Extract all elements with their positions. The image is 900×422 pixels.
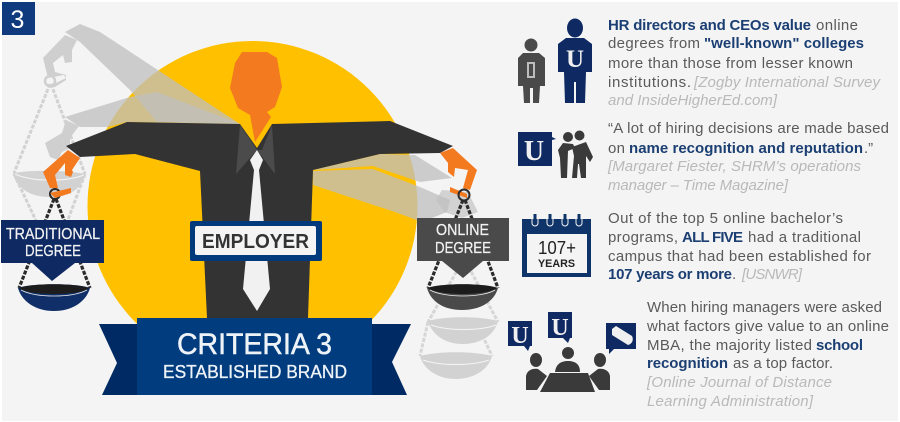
icon: two people with degree badges: U [566,46,584,73]
text: top 5 bachelor's programs: ALL FIVE [682,229,743,246]
text: top 5 bachelor's programs: [USNWR] [741,266,803,283]
text: hiring managers MBA [646,299,889,410]
right hand [440,148,477,190]
sign: online degree [417,218,509,278]
text: HR directors: HR directors and CEOs value [608,17,811,34]
text: top 5 bachelor's programs: . [732,266,736,283]
text: hiring decisions quote: name recognition and reputation [629,140,863,157]
icon: meeting with speech bubbles: U [551,315,569,341]
text: HR directors [608,17,882,109]
text: top 5 bachelor's programs: programs, [608,229,678,246]
banner title: CRITERIA 3 [177,328,332,361]
text: top 5 bachelor's programs: Out of the top 5 online bachelor’s [608,210,843,227]
employer figure [66,52,453,318]
sign: employer [190,221,322,261]
sign: traditional degree: DEGREE [25,243,81,260]
right scale: online degree pan [427,187,498,310]
text: hiring managers MBA: as a top factor. [733,355,833,372]
text: hiring managers MBA: school [816,337,863,354]
banner subtitle: ESTABLISHED BRAND [163,362,347,382]
sign: traditional degree: TRADITIONAL [6,226,100,243]
sign: online degree: DEGREE [435,240,491,257]
text: HR directors: online [816,17,858,34]
icon: two people with degree badges [518,18,592,103]
number badge [2,2,35,35]
banner [99,318,411,395]
lapels [236,125,275,174]
text: HR directors: more than those from lesser known [608,55,853,72]
text: hiring managers MBA: When hiring managers were asked [647,299,882,316]
ghost scale: left raised position [13,35,85,225]
number badge: 3 [11,6,24,34]
text: hiring managers MBA: MBA, the majority listed [647,337,812,354]
text: hiring decisions quote: manager – Time Magazine] [608,177,789,194]
yellow circle [88,41,418,371]
tie [243,150,270,311]
sign: employer: EMPLOYER [202,231,310,253]
ghost arms [65,24,452,222]
text: top 5 bachelor's programs [608,210,871,283]
text: HR directors: degrees from [608,35,700,52]
ghost scale: right lowered position [420,190,498,379]
jacket [66,121,453,318]
sign: traditional degree [1,220,104,281]
text: top 5 bachelor's programs: campus that had been established for [608,248,871,265]
left scale: traditional degree pan [18,188,90,311]
icon: meeting with speech bubbles: U [511,323,529,349]
text: hiring decisions quote: .” [864,140,873,157]
text: HR directors: and InsideHigherEd.com] [608,92,778,109]
text: hiring managers MBA: [Online Journal of Distance [646,374,832,391]
text: HR directors: institutions. [608,74,691,91]
icon: meeting with speech bubbles [508,312,636,392]
head [230,52,282,142]
icon: speech bubble and two people whispering: U [524,136,544,167]
text: hiring decisions quote [607,120,889,194]
icon: speech bubble and two people whispering [518,130,593,178]
text: hiring decisions quote: on [608,140,625,157]
icon: calendar 107+ years: 107+ [538,238,576,258]
icon: calendar 107+ years: YEARS [538,258,575,270]
text: hiring managers MBA: what factors give value to an online [646,318,889,335]
text: hiring decisions quote: “A lot of hiring decisions are made based [608,120,889,137]
text: hiring managers MBA: recognition [647,355,728,372]
text: hiring decisions quote: [Margaret Fiester, SHRM’s operations [607,158,862,175]
ribbon tails [99,324,137,395]
left hand [43,150,80,188]
sign: online degree: ONLINE [436,222,489,239]
text: top 5 bachelor's programs: had a traditional [748,229,861,246]
text: HR directors: "well-known" colleges [704,35,864,52]
text: HR directors: [Zogby International Survey [693,74,882,91]
text: top 5 bachelor's programs: 107 years or more [608,266,732,283]
icon: calendar 107+ years [522,214,591,277]
text: hiring managers MBA: Learning Administration] [647,393,814,410]
